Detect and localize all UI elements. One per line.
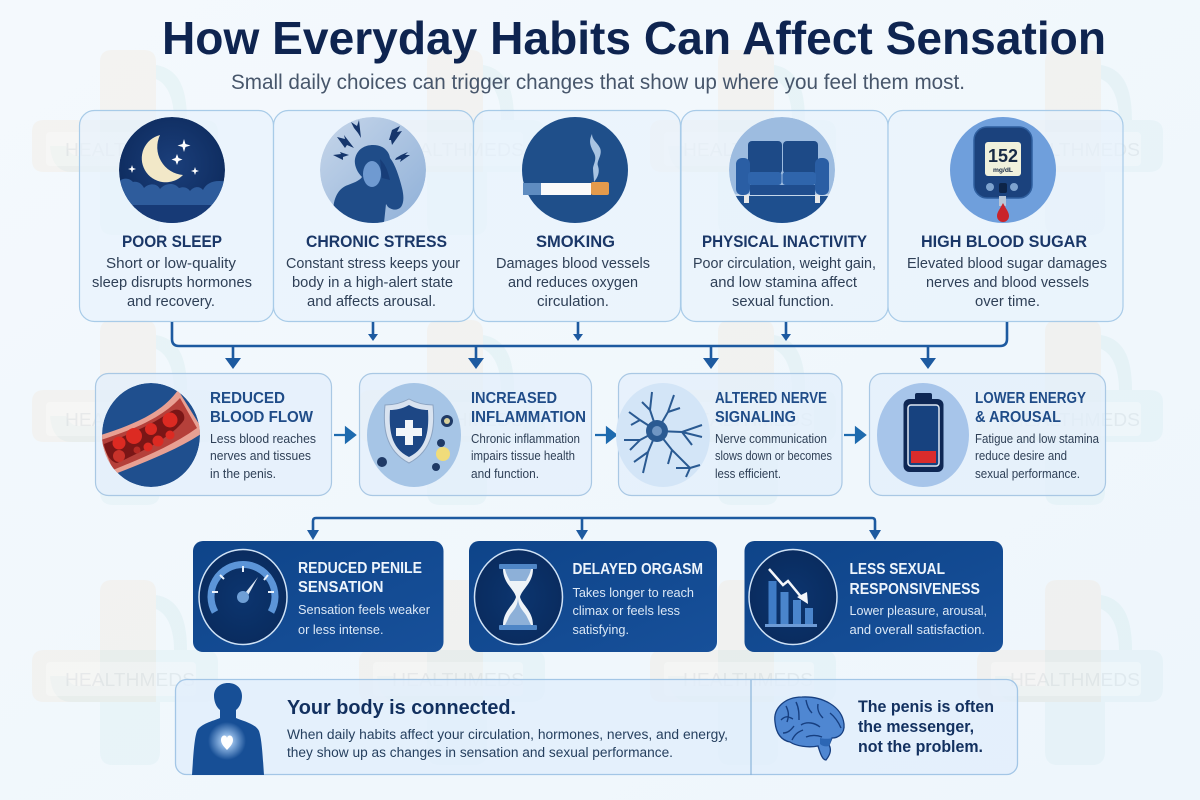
description: Constant stress keeps your xyxy=(286,256,460,272)
heading: SIGNALING xyxy=(715,409,796,426)
icon: stressed person xyxy=(320,117,426,223)
description: and low stamina affect xyxy=(710,275,857,291)
callout: The penis is often xyxy=(858,697,994,716)
heading: LOWER ENERGY xyxy=(975,390,1086,407)
heading: & AROUSAL xyxy=(975,409,1061,426)
description: and affects arousal. xyxy=(307,294,436,310)
callout xyxy=(858,697,994,756)
panel: reduced blood flow xyxy=(96,374,332,496)
description: less efficient. xyxy=(715,467,781,481)
connector: mechanisms to outcomes xyxy=(307,518,881,540)
panel: chronic stress xyxy=(274,110,474,322)
description: sleep disrupts hormones xyxy=(92,275,252,291)
description: When daily habits affect your circulation, hormones, nerves, and energy, xyxy=(287,727,728,742)
heading xyxy=(715,390,827,426)
description: nerves and tissues xyxy=(210,449,311,463)
arrow xyxy=(844,428,865,442)
text: HEALTHMEDS xyxy=(392,670,524,690)
description: Elevated blood sugar damages xyxy=(907,256,1107,272)
heading: INFLAMMATION xyxy=(471,409,586,426)
text: HEALTHMEDS xyxy=(65,140,195,160)
heading: ALTERED NERVE xyxy=(715,390,827,407)
text: HEALTHMEDS xyxy=(392,140,524,160)
description: climax or feels less xyxy=(572,603,680,618)
icon: glucose meter: 152 xyxy=(988,146,1018,166)
description xyxy=(850,603,987,637)
description xyxy=(496,256,650,310)
heading: SMOKING xyxy=(536,233,615,251)
text: HEALTHMEDS xyxy=(392,410,524,430)
description xyxy=(471,432,580,481)
heading: BLOOD FLOW xyxy=(210,409,314,426)
icon: glucose meter: mg/dL xyxy=(993,167,1013,174)
description: impairs tissue health xyxy=(471,449,575,463)
panel: increased inflammation xyxy=(360,374,592,496)
description: Lower pleasure, arousal, xyxy=(850,603,987,618)
icon: moon and clouds xyxy=(118,117,228,225)
heading: REDUCED PENILE xyxy=(298,560,422,577)
description: satisfying. xyxy=(572,622,629,637)
description: and function. xyxy=(471,467,539,481)
description: Poor circulation, weight gain, xyxy=(693,256,876,272)
text: HEALTHMEDS xyxy=(683,410,813,430)
icon: low battery xyxy=(877,383,969,487)
heading: INCREASED xyxy=(471,390,557,407)
text: HEALTHMEDS xyxy=(683,670,813,690)
description: they show up as changes in sensation and sexual performance. xyxy=(287,745,673,760)
icon: shield xyxy=(367,383,461,487)
text: HEALTHMEDS xyxy=(1010,670,1140,690)
icon: hourglass xyxy=(474,550,562,644)
description: and reduces oxygen xyxy=(508,275,638,291)
text: HEALTHMEDS xyxy=(65,670,195,690)
description xyxy=(907,256,1107,310)
description: Short or low-quality xyxy=(106,256,237,272)
heading: REDUCED xyxy=(210,390,285,407)
divider xyxy=(750,680,752,775)
description: or less intense. xyxy=(298,622,384,637)
connector: causes to mechanisms xyxy=(172,322,1007,369)
description: sexual performance. xyxy=(975,467,1080,481)
description: Sensation feels weaker xyxy=(298,602,431,617)
arrow xyxy=(595,428,616,442)
description: reduce desire and xyxy=(975,449,1067,463)
panel: lower energy and arousal xyxy=(870,374,1106,496)
panel: high blood sugar xyxy=(888,110,1123,322)
panel: altered nerve signaling xyxy=(616,374,842,496)
text: HEALTHMEDS xyxy=(1010,140,1140,160)
description: nerves and blood vessels xyxy=(926,275,1089,291)
text: HEALTHMEDS xyxy=(1010,410,1140,430)
description: Chronic inflammation xyxy=(471,432,580,446)
icon: brain xyxy=(775,697,844,760)
icon: gauge xyxy=(199,550,287,644)
heading xyxy=(975,390,1086,426)
heading xyxy=(210,390,314,426)
description xyxy=(975,432,1099,481)
callout: not the problem. xyxy=(858,737,983,756)
icon: declining bar chart xyxy=(749,550,837,644)
panel: poor sleep xyxy=(80,110,274,322)
description: in the penis. xyxy=(210,467,276,481)
description xyxy=(210,432,316,481)
description xyxy=(92,256,252,310)
description: circulation. xyxy=(537,294,609,310)
description: and recovery. xyxy=(127,294,215,310)
heading xyxy=(298,560,422,596)
panel: smoking xyxy=(474,110,680,322)
description: Damages blood vessels xyxy=(496,256,650,272)
description xyxy=(715,432,832,481)
callout: the messenger, xyxy=(858,717,974,736)
subtitle: Small daily choices can trigger changes that show up where you feel them most. xyxy=(231,71,965,94)
description: Less blood reaches xyxy=(210,432,316,446)
heading: LESS SEXUAL xyxy=(850,561,945,578)
description: body in a high-alert state xyxy=(292,275,453,291)
description xyxy=(287,727,728,760)
description xyxy=(298,602,431,637)
description: slows down or becomes xyxy=(715,449,832,463)
description: and overall satisfaction. xyxy=(850,622,985,637)
description: sexual function. xyxy=(732,294,834,310)
icon: neuron xyxy=(616,383,710,487)
description: Nerve communication xyxy=(715,432,827,446)
heading: HIGH BLOOD SUGAR xyxy=(921,233,1087,251)
panel: physical inactivity xyxy=(681,110,888,322)
icon: glucose meter xyxy=(950,117,1056,223)
heading xyxy=(471,390,586,426)
panel: delayed orgasm xyxy=(469,541,717,652)
icon: human figure with glowing heart xyxy=(192,683,264,775)
description: Takes longer to reach xyxy=(572,585,694,600)
description xyxy=(572,585,694,637)
heading: DELAYED ORGASM xyxy=(572,561,703,578)
icon: blood vessel xyxy=(98,383,204,487)
icon: cigarette xyxy=(522,117,628,223)
description: over time. xyxy=(975,294,1040,310)
text: HEALTHMEDS xyxy=(65,410,195,430)
description: Fatigue and low stamina xyxy=(975,432,1099,446)
arrow xyxy=(334,428,355,442)
panel: reduced penile sensation xyxy=(193,541,444,652)
heading: CHRONIC STRESS xyxy=(306,233,447,251)
heading xyxy=(850,561,980,598)
description xyxy=(286,256,460,310)
icon: couch xyxy=(729,117,835,223)
title: How Everyday Habits Can Affect Sensation xyxy=(162,12,1106,64)
description xyxy=(693,256,876,310)
heading: Your body is connected. xyxy=(287,697,516,719)
panel: summary banner xyxy=(176,680,1018,775)
heading: SENSATION xyxy=(298,579,384,596)
heading: RESPONSIVENESS xyxy=(850,581,980,598)
heading: POOR SLEEP xyxy=(122,233,222,251)
heading: PHYSICAL INACTIVITY xyxy=(702,233,867,251)
text: HEALTHMEDS xyxy=(683,140,813,160)
panel: less sexual responsiveness xyxy=(744,541,1003,652)
